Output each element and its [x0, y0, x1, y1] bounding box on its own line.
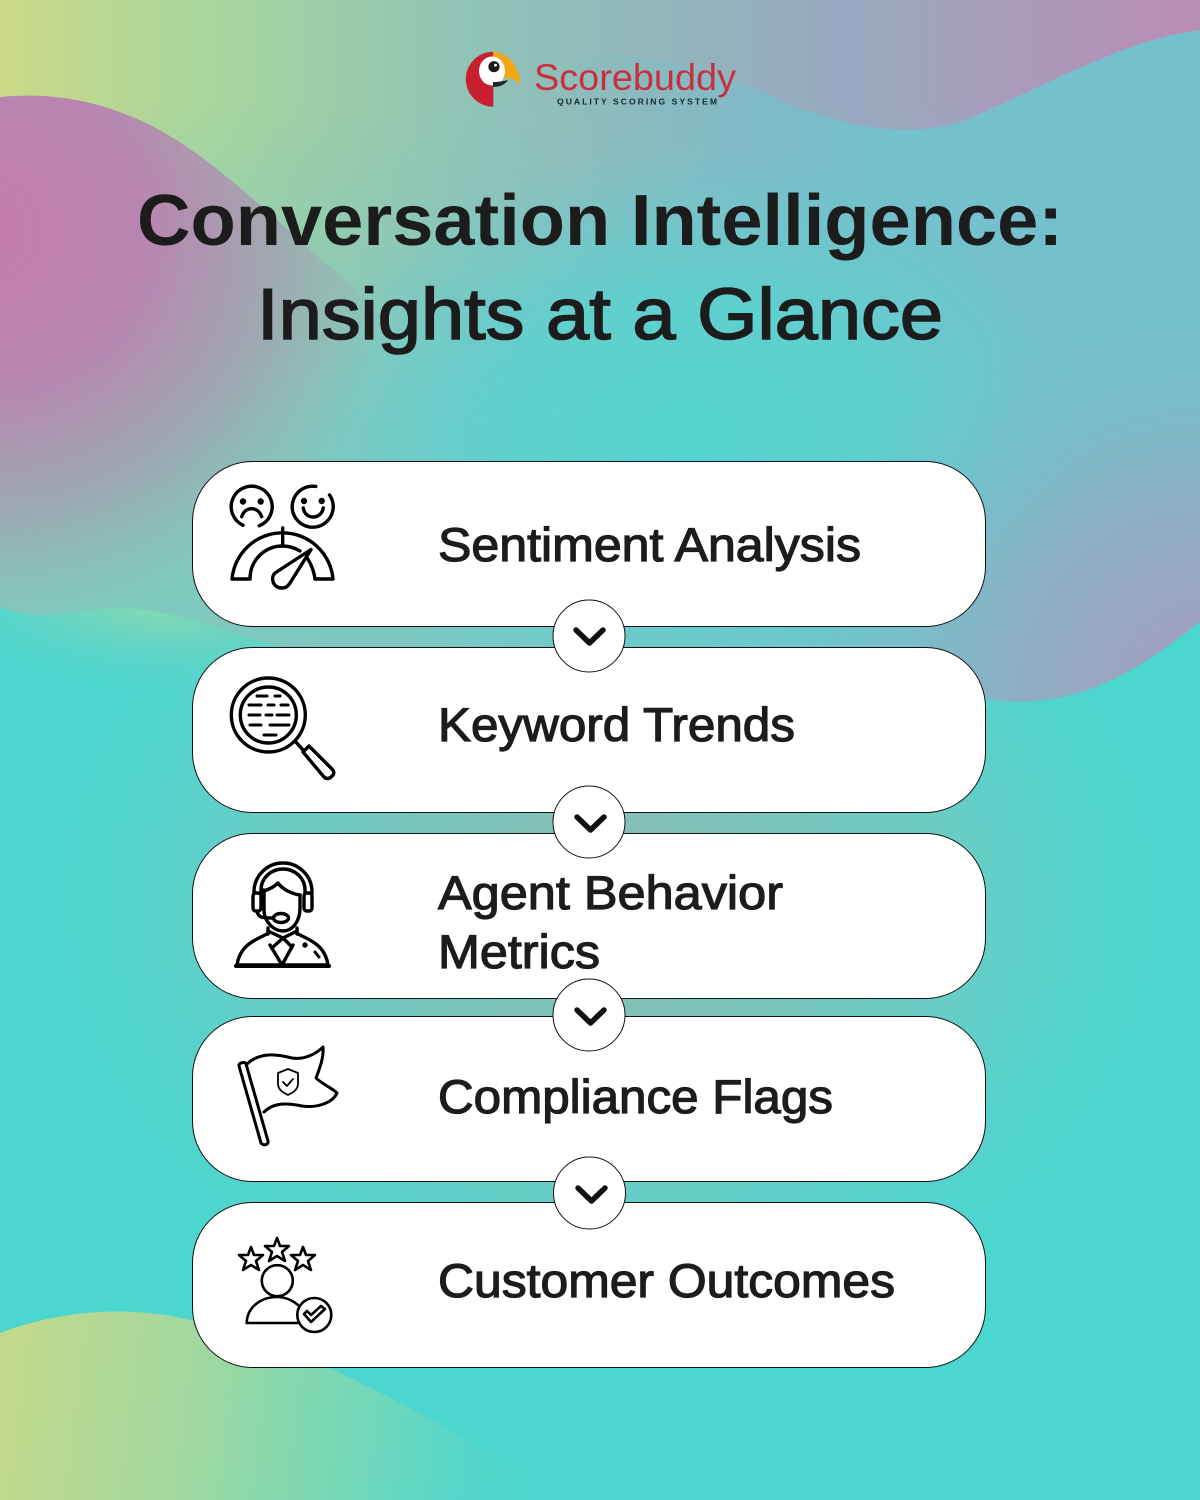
- label: Metrics: [438, 925, 600, 978]
- arrow: connector 1: [553, 600, 625, 672]
- logo: Scorebuddy: [466, 52, 737, 107]
- arrow: connector 3: [553, 979, 625, 1051]
- label: Sentiment Analysis: [438, 518, 861, 571]
- label: [438, 866, 783, 978]
- card: Sentiment Analysis: [192, 462, 986, 626]
- title line 1: Conversation Intelligence:: [137, 181, 1063, 261]
- tagline: QUALITY SCORING SYSTEM: [557, 96, 717, 106]
- card: Customer Outcomes: [192, 1202, 986, 1368]
- label: Compliance Flags: [438, 1070, 833, 1123]
- wordmark: Scorebuddy: [534, 57, 737, 98]
- card: Keyword Trends: [192, 648, 986, 812]
- icon: parrot: [466, 52, 521, 107]
- title: [137, 181, 1063, 355]
- label: Customer Outcomes: [438, 1254, 895, 1307]
- title line 2: Insights at a Glance: [257, 275, 943, 355]
- icon: call agent: [236, 863, 329, 966]
- icon: magnifier: [231, 678, 334, 778]
- icon: sentiment gauge: [224, 478, 341, 588]
- icon: customer rating: [239, 1238, 331, 1332]
- arrow: connector 2: [553, 786, 625, 858]
- card: Agent Behavior Metrics: [192, 834, 986, 998]
- card: Compliance Flags: [192, 1016, 986, 1182]
- label: Agent Behavior: [438, 866, 783, 919]
- label: Keyword Trends: [438, 698, 795, 751]
- icon: compliance flag: [239, 1047, 337, 1145]
- arrow: connector 4: [554, 1157, 626, 1229]
